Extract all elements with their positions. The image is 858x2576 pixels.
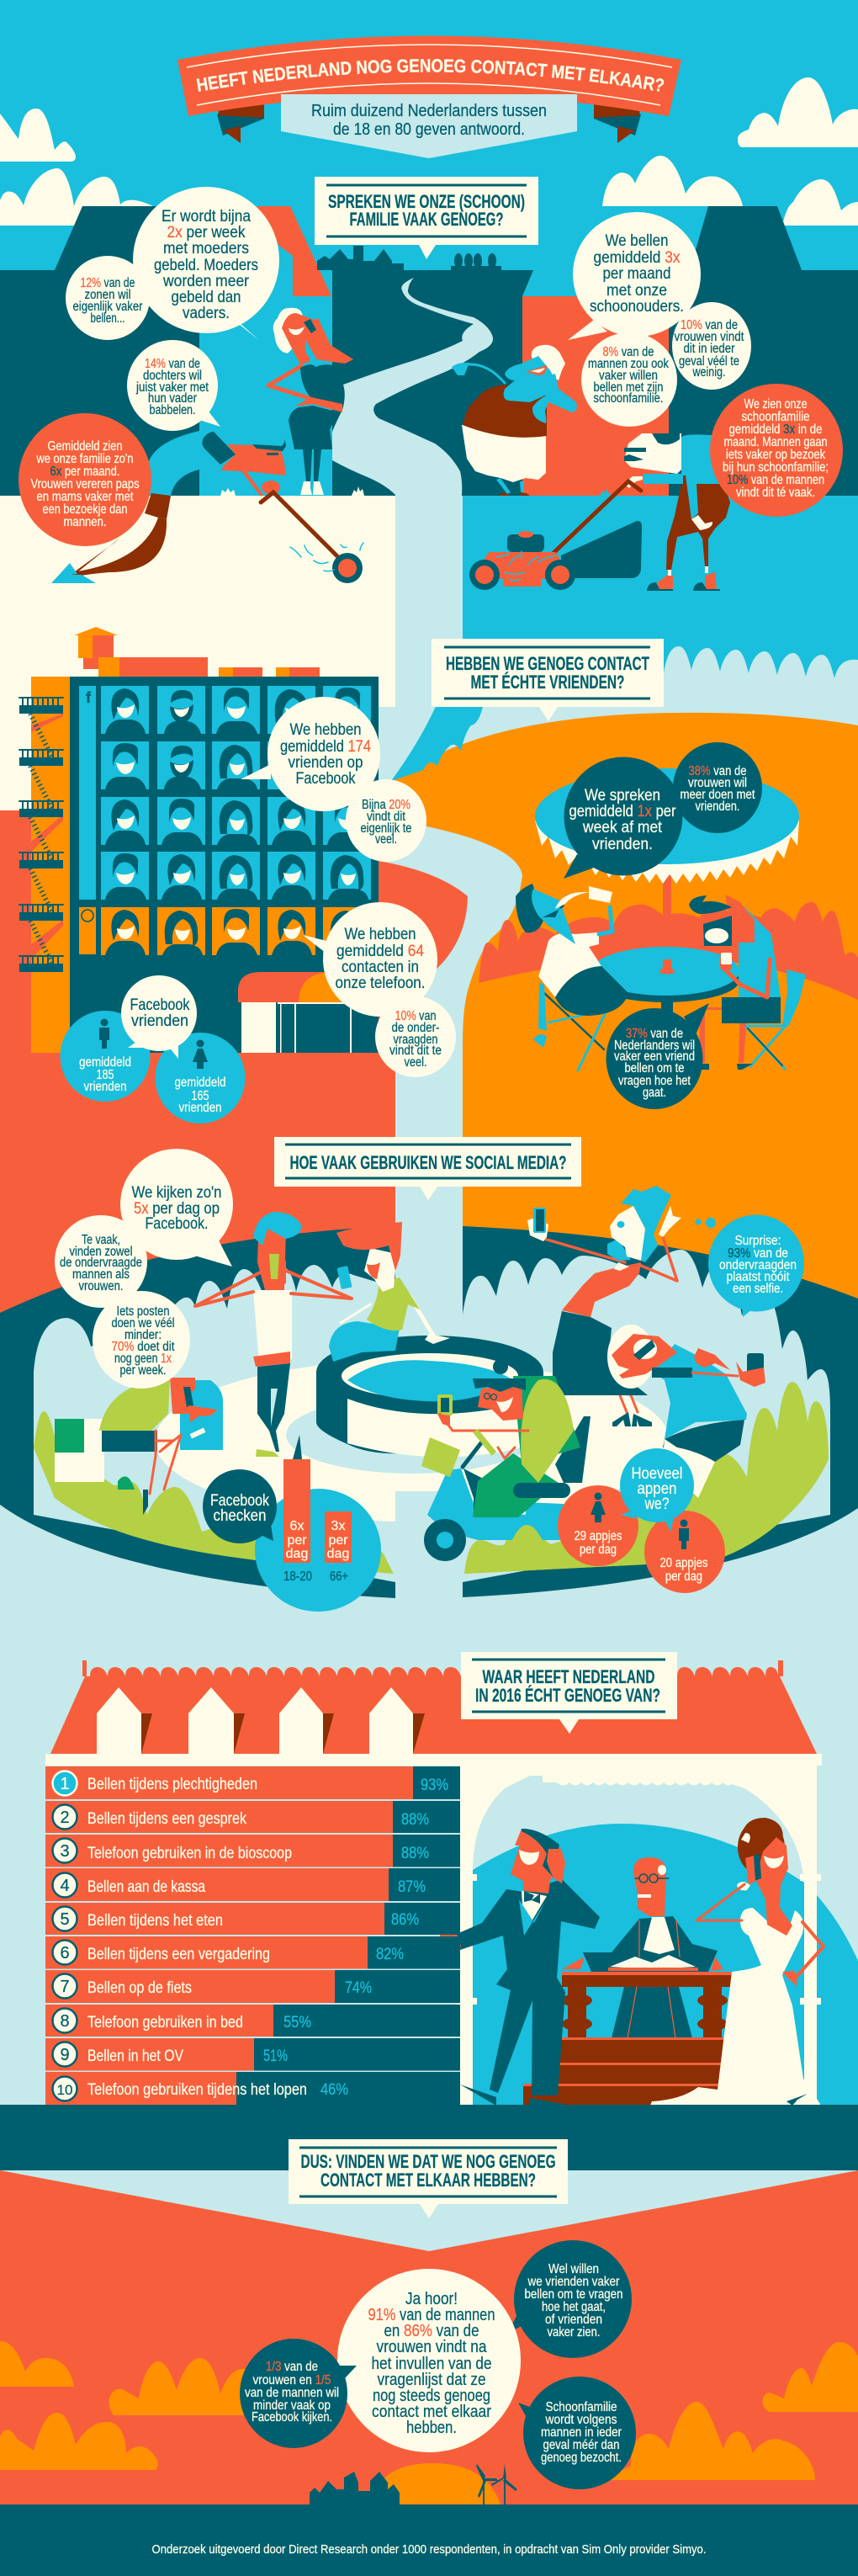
bubble: 174 friends: gemiddeld 174 (280, 737, 371, 756)
grass tufts on red (600, 488, 611, 496)
bubble: one third: van de mannen wil (245, 2386, 339, 2400)
bubble: posting: per week. (119, 1363, 167, 1378)
rank numbers: 2 (60, 1809, 70, 1827)
bubble: one third: 1/3 van de (266, 2360, 318, 2374)
shop front (238, 972, 379, 1053)
ranking bar chart: Bellen tijdens plechtigheden (87, 1776, 257, 1793)
bubble: 38% women: meer doen met (680, 788, 755, 802)
bubble: 2x per week: gebeld dan (172, 288, 241, 306)
facebook friends: men (61, 1011, 150, 1102)
bubble: 64 contacts (303, 902, 437, 1017)
bubble: 2x per week: gebeld. Moeders (154, 256, 258, 274)
facebook friends: men: vrienden (84, 1080, 126, 1094)
bubble: 3x schoonouders: met onze (606, 281, 667, 300)
bubble: schoonfamilie: wordt volgens (545, 2413, 617, 2427)
bubble: main conclusion: contact met elkaar (372, 2403, 491, 2421)
bubble: posting: doen we véél (111, 1316, 175, 1330)
bubble: 6x per month (19, 413, 151, 546)
ranking bar chart: Telefoon gebruiken tijdens het lopen (87, 2081, 307, 2099)
bubble: selfie: ondervraagden (719, 1258, 797, 1272)
houses section 1 (0, 206, 858, 496)
title box: enough of: WAAR HEEFT NEDERLAND (483, 1666, 654, 1687)
facebook friend windows (101, 686, 371, 900)
fountain (316, 1336, 543, 1457)
facebook friends: women: 165 (192, 1089, 209, 1103)
figure: lady on mobility scooter (421, 1359, 591, 1561)
figure: woman drinking (516, 884, 628, 1070)
subtitle panel: Ruim duizend Nederlanders tussen (311, 102, 547, 120)
bubble: main conclusion: vragenlijst dat ze (377, 2371, 486, 2389)
bubble: selfie: 93% van de (728, 1246, 788, 1261)
bubble: 20% too many: vindt dit (367, 810, 406, 824)
figure: man checking phone (195, 1212, 352, 1457)
bubble: 8% men (581, 332, 677, 427)
rank numbers: 1 (60, 1775, 70, 1793)
background: red hill left (0, 810, 468, 1313)
bubble: in-laws visits: maand. Mannen gaan (723, 435, 828, 449)
clouds: top (0, 77, 858, 226)
bubble: selfie: een selfie. (733, 1282, 783, 1296)
title ribbon (177, 35, 681, 143)
bubble: 12% sons: zonen wil (84, 288, 131, 302)
bubble: 5x per day: We kijken zo'n (131, 1183, 222, 1202)
bubble: one third: vrouwen en 1/5 (252, 2373, 331, 2387)
background: cream field (0, 496, 395, 832)
bubble: 14% daughters: dochters wil (143, 369, 202, 383)
bubble: wel willen: we vrienden vaker (527, 2275, 620, 2289)
bubble: in-laws visits: schoonfamilie (742, 410, 810, 424)
bubble: 38% women (673, 742, 762, 833)
bubble: facebook checken: checken (214, 1506, 266, 1525)
facebook check bar chart: dag (327, 1547, 349, 1561)
bubble: 12% sons: 12% van de (81, 276, 135, 290)
bubble: facebook checken: Facebook (210, 1491, 269, 1510)
bubble: 37% call a friend: vragen hoe het (618, 1074, 691, 1088)
facebook check bar chart: dag (286, 1547, 308, 1561)
rank numbers: 7 (60, 1978, 70, 1996)
bubble: 64 contacts: gemiddeld 64 (336, 942, 424, 960)
facebook check bar chart: 18-20 (283, 1570, 312, 1584)
bubble: schoonfamilie (518, 2377, 636, 2489)
ranking bar chart: Bellen aan de kassa (87, 1878, 205, 1896)
bubble: 6x per month: 6x per maand. (50, 465, 119, 479)
bubble: too often: mannen als (72, 1267, 130, 1282)
ranking bar chart: Bellen op de fiets (87, 1979, 192, 1997)
bubble: 174 friends: vrienden op (288, 753, 363, 772)
title box: conclusion: DUS: VINDEN WE DAT WE NOG GENOEG (301, 2151, 555, 2172)
plaza: left cream edge (252, 1491, 395, 1522)
bubble: selfie (708, 1215, 804, 1317)
facebook check bar chart: 3x (331, 1519, 345, 1533)
conclusion background (0, 2105, 858, 2576)
app count: men: per dag (665, 1570, 702, 1584)
bubble: 174 friends: Facebook (296, 769, 356, 788)
bubble: 6x per month: een bezoekje dan (42, 502, 128, 517)
figure: laughing man (607, 1325, 765, 1498)
bubble: 2x per week: worden meer (162, 272, 249, 290)
title box: enough of (461, 1652, 677, 1734)
bubble: selfie: plaatst nóóit (727, 1270, 790, 1284)
bubble: too often: vrouwen. (79, 1279, 123, 1293)
background: pale road column (395, 496, 463, 1539)
bubble: too often: vinden zowel (69, 1245, 133, 1259)
bubble: 1x per week: week af met (582, 818, 663, 837)
bubble: 8% men: mannen zou ook (588, 357, 669, 371)
facebook check bar chart: per (328, 1533, 348, 1548)
bubble: 3x schoonouders: per maand (602, 264, 671, 283)
skyline and windmills (310, 2464, 517, 2504)
facebook check bar chart (255, 1435, 381, 1612)
bubble: 64 contacts: onze telefoon. (335, 974, 426, 992)
red trees behind cafe (479, 902, 858, 1000)
bubble: 1x per week: We spreken (585, 786, 660, 805)
grass tufts on teal (352, 486, 364, 496)
water tower (74, 627, 118, 677)
title box: friends (432, 639, 664, 721)
whatsapp column (79, 907, 96, 954)
social media square: pale field right (463, 1250, 830, 1582)
bubble: posting: 70% doet dit (111, 1340, 175, 1354)
phone hand over table (436, 1923, 458, 1965)
bubble: 10% women: 10% van de (681, 318, 738, 332)
bubble: 20% too many (346, 779, 426, 862)
title ribbon: HEEFT NEDERLAND NOG GENOEG CONTACT MET ELKAAR? (197, 59, 665, 92)
rank numbers: 9 (60, 2046, 70, 2064)
bubble: main conclusion: het invullen van de (372, 2355, 491, 2373)
bubble: main conclusion: Ja hoor! (405, 2290, 458, 2308)
footer text: Onderzoek uitgevoerd door Direct Research onder 1000 respondenten, in opdracht van Sim Only provider Simyo. (151, 2542, 707, 2557)
bubble: 38% women: 38% van de (688, 764, 747, 778)
bubble: 6x per month: mannen. (64, 515, 106, 529)
orange clouds (0, 2341, 858, 2504)
preacher (562, 1857, 723, 2038)
facebook column: f (86, 689, 92, 706)
bubble: 10% too many: 10% van (395, 1009, 436, 1023)
bubble: main conclusion: 91% van de mannen (368, 2306, 495, 2324)
roof cornice (45, 1754, 822, 1766)
bubble: main conclusion (337, 2269, 521, 2452)
figure: woman on fountain edge (329, 1222, 450, 1362)
background: cyan sky tail (391, 703, 484, 781)
facebook friends: women: vrienden (178, 1101, 222, 1115)
bubble: hoeveel appen: Hoeveel (631, 1464, 683, 1483)
bubble: main conclusion: hebben. (406, 2419, 457, 2437)
app count: women: 29 appjes (574, 1529, 622, 1543)
bushes right front (464, 1525, 711, 1574)
rank numbers: 5 (60, 1910, 70, 1929)
bubble: 3x schoonouders: schoonouders. (590, 297, 684, 316)
bubble: 37% call a friend: 37% van de (626, 1027, 683, 1041)
social media square: dark ring left (0, 1226, 395, 1598)
cafe table (591, 947, 739, 1027)
app count: men: 20 appjes (659, 1556, 708, 1570)
winding road (332, 278, 493, 589)
title box: friends: MET ÉCHTE VRIENDEN? (471, 672, 624, 693)
bubble: wel willen: hoe het gaat, (542, 2300, 606, 2314)
bubble: 14% daughters (127, 340, 220, 431)
figure: grandmother on phone (452, 345, 577, 496)
ranking bar chart: Bellen tijdens een gesprek (87, 1810, 246, 1828)
bubble: in-laws visits (710, 384, 843, 517)
bubble: facebook friends label: Facebook (130, 996, 190, 1014)
app count: men (644, 1511, 725, 1593)
rank numbers (52, 1771, 77, 2101)
facebook friends: men: 185 (96, 1068, 114, 1082)
figure: woman on phone (268, 308, 353, 495)
dormer windows (97, 1687, 425, 1754)
bubble: 10% women: vrouwen vindt (675, 330, 744, 344)
rank numbers: 4 (60, 1877, 70, 1895)
bubble: facebook checken (203, 1469, 277, 1543)
bubble: posting: nog geen 1x (114, 1352, 172, 1366)
facebook friends: women: gemiddeld (175, 1076, 225, 1090)
fire escapes (19, 698, 63, 972)
social media square: dark ring right (463, 1226, 858, 1597)
bubble: 14% daughters: babbelen. (150, 403, 195, 417)
bubble: 12% sons: eigenlijk vaker (72, 300, 143, 314)
facebook friends: women (155, 1033, 246, 1123)
background: orange hill right (391, 713, 858, 1313)
bubble: 14% daughters: 14% van de (145, 357, 200, 371)
ranking bar chart: Bellen tijdens een vergadering (87, 1946, 270, 1963)
figure: man with lawnmower (469, 433, 740, 591)
ranking bar chart (45, 1766, 460, 2105)
ranking bar chart: 93% (421, 1777, 448, 1794)
bubble: 37% call a friend: Nederlanders wil (614, 1038, 695, 1053)
bubble: 37% call a friend: gaat. (643, 1086, 666, 1100)
bubble: wel willen (508, 2240, 632, 2358)
bubble: one third: minder vaak op (253, 2398, 331, 2413)
bubble: 2x per week (133, 187, 279, 341)
background: pale blue lower ground (0, 1498, 858, 2106)
background: sky (0, 0, 858, 673)
bubble: in-laws visits: 10% van de mannen (727, 473, 824, 487)
social media square: pale field left (34, 1265, 395, 1582)
bubble: 2x per week: Er wordt bijna (162, 207, 251, 226)
title box: family: SPREKEN WE ONZE (SCHOON) (328, 191, 525, 212)
bubble: 1x per week: vrienden. (592, 835, 653, 853)
bubble: 64 contacts: contacten in (342, 958, 419, 976)
title box: social media: HOE VAAK GEBRUIKEN WE SOCIAL MEDIA? (289, 1152, 567, 1173)
bubble: posting: Iets posten (116, 1304, 170, 1319)
bubble: posting: minder: (124, 1328, 162, 1342)
bubble: one third: Facebook kijken. (252, 2410, 332, 2425)
bubble: selfie: Surprise: (735, 1234, 781, 1248)
bushes left (34, 1411, 394, 1574)
grass tufts (220, 488, 236, 496)
ranking bar chart: 88% (401, 1811, 429, 1829)
bubble: wel willen: Wel willen (548, 2262, 599, 2276)
bubble: in-laws visits: We zien onze (744, 397, 808, 412)
bubble: wel willen: bellen om te vragen (525, 2287, 622, 2302)
bubble: in-laws visits: bij hun schoonfamilie; (723, 460, 829, 475)
bubble: 5x per day (120, 1149, 233, 1267)
background: pale bend behind hill (370, 707, 538, 1229)
title box: conclusion (289, 2139, 568, 2218)
bubble: 1x per week: gemiddeld 1x per (569, 802, 676, 821)
bubble: 6x per month: Gemiddeld zien (47, 439, 123, 454)
bubble: 14% daughters: juist vaker met (135, 380, 209, 395)
bubble: hoeveel appen: appen (638, 1479, 676, 1498)
bubble: 20% too many: veel. (375, 832, 397, 847)
ranking bar chart: Telefoon gebruiken in bed (87, 2014, 243, 2032)
bubble: 2x per week: 2x per week (167, 223, 246, 242)
bubble: 37% call a friend (606, 1003, 709, 1109)
figure: bent man with lawnmower (51, 432, 363, 583)
bubble: 8% men: bellen met zijn (594, 380, 663, 395)
title box: social media (274, 1137, 581, 1200)
rank numbers: 10 (57, 2082, 72, 2098)
bubble: 10% women: geval véél te (679, 354, 739, 369)
bubble: schoonfamilie: genoeg bezocht. (541, 2451, 622, 2465)
bubble: 3x schoonouders (568, 212, 701, 340)
ranking bar chart: 87% (398, 1878, 426, 1896)
ranking bar chart: 88% (401, 1845, 429, 1862)
bubble: 38% women: vrienden. (695, 799, 740, 814)
bubble: 10% women: weinig. (692, 365, 725, 380)
background: pale cloud band (471, 646, 858, 757)
plaza: road below ring (395, 1491, 463, 1542)
bubble: 2x per week: met moeders (163, 239, 249, 258)
bubble: wel willen: of vrienden (545, 2313, 602, 2327)
apartment building (0, 627, 379, 1060)
umbrella (535, 768, 799, 971)
bubble: facebook friends label (121, 975, 197, 1059)
lectern and steps (523, 1972, 732, 2106)
rank numbers: 8 (60, 2012, 70, 2031)
bubble: 10% women: dit in ieder (683, 342, 735, 356)
bubble: 6x per month: we onze familie zo'n (36, 452, 133, 466)
ranking bar chart: 46% (320, 2081, 348, 2099)
bubble: 1x per week (564, 757, 683, 879)
bubble: 3x schoonouders: gemiddeld 3x (594, 248, 681, 267)
bushes right (464, 1382, 829, 1574)
bubble: 37% call a friend: bellen om te (624, 1061, 685, 1076)
bubble: 10% women (672, 302, 751, 390)
bubble: schoonfamilie: geval méér dan (543, 2438, 619, 2452)
bubble: 37% call a friend: vaker een vriend (614, 1049, 695, 1064)
ranking bar chart: Telefoon gebruiken in de bioscoop (87, 1845, 292, 1862)
bubble: 5x per day: Facebook. (145, 1214, 209, 1233)
ranking bar chart: 74% (345, 1979, 372, 1997)
bubble: 6x per month: en mams vaker met (37, 490, 134, 504)
bubble: 14% daughters: hun vader (148, 391, 197, 406)
bubble: in-laws visits: iets vaker op bezoek (726, 448, 826, 462)
ranking bar chart: 86% (391, 1911, 419, 1929)
chapel frame (456, 1766, 858, 2106)
subtitle panel: de 18 en 80 geven antwoord. (333, 120, 525, 139)
bubble: in-laws visits: gemiddeld 3x in de (728, 422, 823, 437)
bubble: too often (55, 1215, 147, 1308)
phone contact windows (101, 907, 371, 955)
bubble: one third (240, 2339, 357, 2448)
bubble: 5x per day: 5x per dag op (134, 1199, 220, 1218)
bubble: 2x per week: vaders. (183, 304, 230, 322)
bubble: 10% too many: vindt dit te (389, 1044, 442, 1058)
bubble: 64 contacts: We hebben (345, 925, 416, 943)
subtitle panel (281, 94, 577, 158)
bubble: in-laws visits: vindt dit té vaak. (736, 486, 815, 500)
figure: selfie woman (527, 1186, 716, 1426)
bubble: too often: de ondervraagde (60, 1256, 142, 1270)
facebook check bar chart: 66+ (330, 1570, 348, 1584)
bubble: main conclusion: nog steeds genoeg (373, 2387, 490, 2405)
bubble: 12% sons: bellen... (91, 311, 124, 326)
facebook check bar chart: 6x (290, 1519, 304, 1533)
bride (650, 1818, 824, 2106)
title box: conclusion: CONTACT MET ELKAAR HEBBEN? (320, 2170, 536, 2191)
town hall roof (50, 1660, 817, 1754)
bubble: 10% too many (375, 996, 456, 1077)
ranking bar chart: 55% (283, 2014, 311, 2032)
ranking bar chart: 51% (263, 2048, 288, 2065)
bubble: wel willen: vaker zien. (547, 2325, 601, 2340)
bubble: 6x per month: Vrouwen vereren paps (30, 477, 140, 491)
cyan arch by man (147, 431, 199, 496)
bubble: main conclusion: en 86% van de (384, 2322, 479, 2340)
bubble: 38% women: vrouwen wil (688, 776, 747, 790)
bubble: 10% too many: de onder- (392, 1021, 439, 1035)
plaza: pale inner circle (286, 1396, 538, 1474)
plaza: cream ring (155, 1360, 670, 1522)
bubble: 10% too many: veel. (404, 1055, 427, 1070)
bubble: 174 friends: We hebben (289, 720, 362, 739)
bubble: hoeveel appen (620, 1448, 694, 1532)
bubble: schoonfamilie: mannen in ieder (541, 2425, 622, 2440)
facebook friends: men: gemiddeld (79, 1055, 131, 1070)
bubble: 8% men: vaker willen (599, 369, 658, 383)
bubble: 3x schoonouders: We bellen (606, 231, 668, 250)
bubble: 10% too many: vraagden (394, 1033, 437, 1047)
facebook check bar chart: per (287, 1533, 307, 1548)
bubble: 20% too many: Bijna 20% (362, 798, 410, 812)
facebook column (79, 686, 96, 900)
app count: women: per dag (580, 1543, 617, 1557)
figure: crouching woman (55, 1378, 223, 1515)
figure: bearded man with cup (689, 895, 806, 1070)
bubble: hoeveel appen: we? (644, 1495, 670, 1513)
ranking bar chart: Bellen in het OV (87, 2048, 183, 2065)
ranking bar chart: 82% (376, 1946, 404, 1963)
bubble: facebook friends label: vrienden (131, 1012, 188, 1030)
title box: friends: HEBBEN WE GENOEG CONTACT (446, 653, 649, 674)
title box: family: FAMILIE VAAK GENOEG? (350, 209, 503, 230)
title box: family (315, 177, 538, 259)
app count: women (558, 1485, 638, 1566)
bubble: 8% men: schoonfamilie. (594, 391, 663, 406)
bubble: 174 friends (241, 697, 380, 811)
title box: enough of: IN 2016 ÉCHT GENOEG VAN? (475, 1685, 660, 1706)
rank numbers: 6 (60, 1944, 70, 1963)
bubble: 8% men: 8% van de (602, 345, 654, 359)
rank numbers: 3 (60, 1842, 70, 1861)
bubble: schoonfamilie: Schoonfamilie (545, 2400, 617, 2414)
bubble: 12% sons (66, 256, 150, 340)
bubble: too often: Te vaak, (82, 1233, 120, 1247)
bubble: 20% too many: eigenlijk te (360, 821, 412, 836)
bubble: main conclusion: vrouwen vindt na (377, 2338, 487, 2356)
bubble: posting (93, 1291, 190, 1389)
ranking bar chart: Bellen tijdens het eten (87, 1912, 223, 1930)
groom (453, 1829, 600, 2106)
